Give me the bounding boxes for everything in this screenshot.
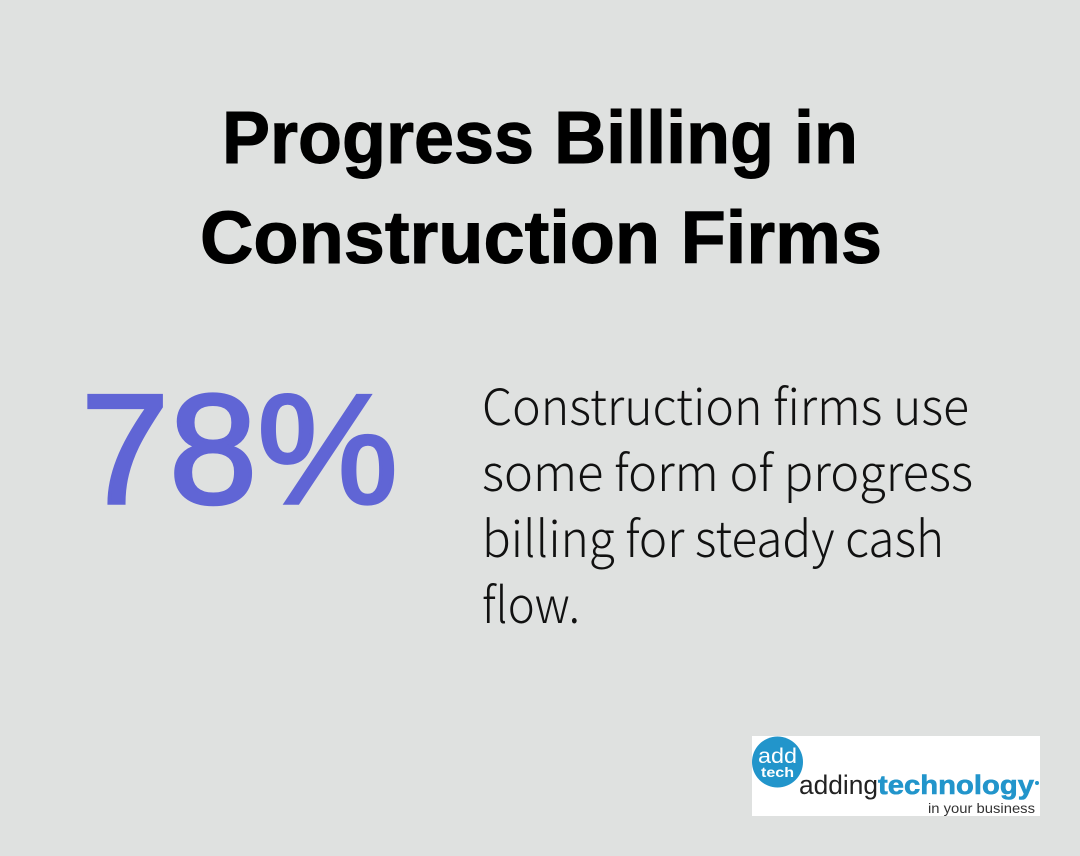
statistic: 78%: 78%	[81, 363, 398, 537]
logo wordmark: technology	[878, 770, 1034, 800]
title	[200, 96, 882, 279]
logo icon: add tech circle: add	[758, 745, 797, 768]
logo wordmark: adding	[799, 770, 878, 800]
description text: Construction firms use	[482, 368, 969, 440]
logo wordmark	[799, 770, 1039, 800]
title: Progress Billing in	[222, 96, 858, 179]
logo tagline: in your business	[928, 800, 1035, 816]
description text: flow.	[482, 566, 580, 638]
logo icon: add tech circle	[752, 736, 803, 788]
description text: billing for steady cash	[482, 500, 944, 572]
description text	[482, 368, 973, 638]
description text: some form of progress	[482, 434, 973, 506]
logo icon: add tech circle: tech	[761, 764, 794, 780]
logo: adding technology	[752, 736, 1040, 816]
title: Construction Firms	[200, 196, 882, 279]
